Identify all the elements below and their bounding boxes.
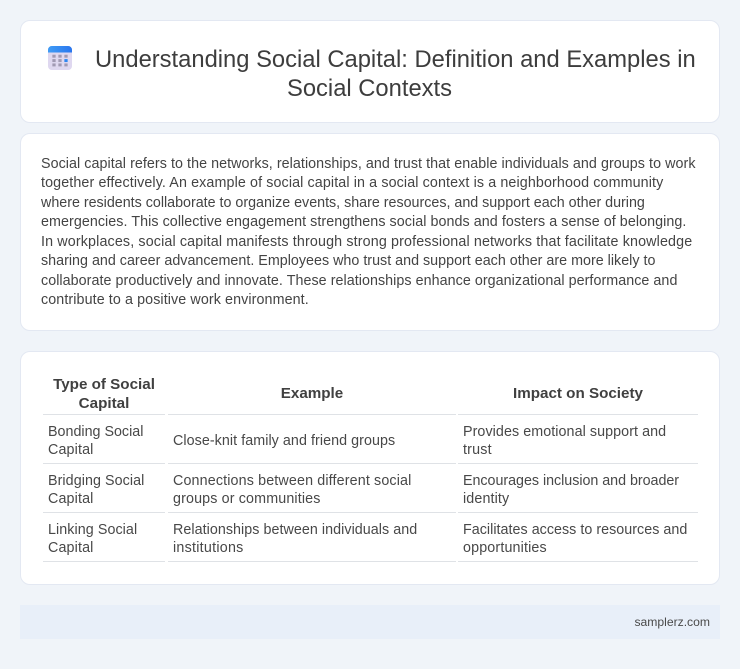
text block: description: Social capital refers to the networks, relationships, and trust that enable individuals and groups to work xyxy=(41,156,696,172)
text block: description: contribute to a positive work environment. xyxy=(41,292,309,308)
panel: table xyxy=(20,351,720,585)
table row: bridging: Bridging Social xyxy=(48,473,144,489)
text block: description: together effectively. An example of social capital in a social context is a neighborhood community xyxy=(41,175,663,191)
title: Social Contexts xyxy=(287,75,452,102)
text block: description: where residents collaborate to organize events, share resources, and support each other during xyxy=(41,195,645,211)
table header: Capital xyxy=(79,395,129,412)
table row: linking: institutions xyxy=(173,540,244,556)
header panel xyxy=(20,20,720,123)
title: Understanding Social Capital: Definition and Examples in xyxy=(95,46,696,73)
table row: bonding: Capital xyxy=(48,442,93,458)
title xyxy=(95,46,696,102)
table row: bridging: Connections between different social xyxy=(173,473,411,489)
panel: description xyxy=(20,133,720,331)
table row: linking: Relationships between individuals and xyxy=(173,522,417,538)
table row: bonding: Provides emotional support and xyxy=(463,424,666,440)
table row: bridging xyxy=(48,473,679,507)
text block: description: emergencies. This collective engagement strengthens social bonds and fosters a sense of belonging. xyxy=(41,214,686,230)
table row: bridging: groups or communities xyxy=(173,491,321,507)
table header xyxy=(53,376,643,412)
table header: Impact on Society xyxy=(513,385,643,402)
text block: description: In workplaces, social capital manifests through strong professional networks that facilitate knowledge xyxy=(41,234,692,250)
table row: bridging: Capital xyxy=(48,491,93,507)
text block: description xyxy=(41,156,696,308)
table header: Example xyxy=(281,385,343,402)
table row: bridging: identity xyxy=(463,491,509,507)
table row: linking: opportunities xyxy=(463,540,547,556)
table row: linking xyxy=(48,522,687,556)
table row: bonding xyxy=(48,424,666,458)
table row: bonding: Bonding Social xyxy=(48,424,143,440)
table row: linking: Capital xyxy=(48,540,93,556)
table row: linking: Linking Social xyxy=(48,522,137,538)
table row: bonding: trust xyxy=(463,442,492,458)
table row: bonding: Close-knit family and friend groups xyxy=(173,433,395,449)
text block: description: collaborate productively and innovate. These relationships enhance organizational performance and xyxy=(41,273,677,289)
footer text: samplerz.com xyxy=(634,615,710,629)
icon: calendar xyxy=(48,46,72,70)
footer bar xyxy=(20,605,720,639)
table row: bridging: Encourages inclusion and broader xyxy=(463,473,679,489)
table row: linking: Facilitates access to resources and xyxy=(463,522,687,538)
table header: Type of Social xyxy=(53,376,155,393)
text block: description: sharing and career advancement. Employees who trust and support each other are more likely to xyxy=(41,253,655,269)
